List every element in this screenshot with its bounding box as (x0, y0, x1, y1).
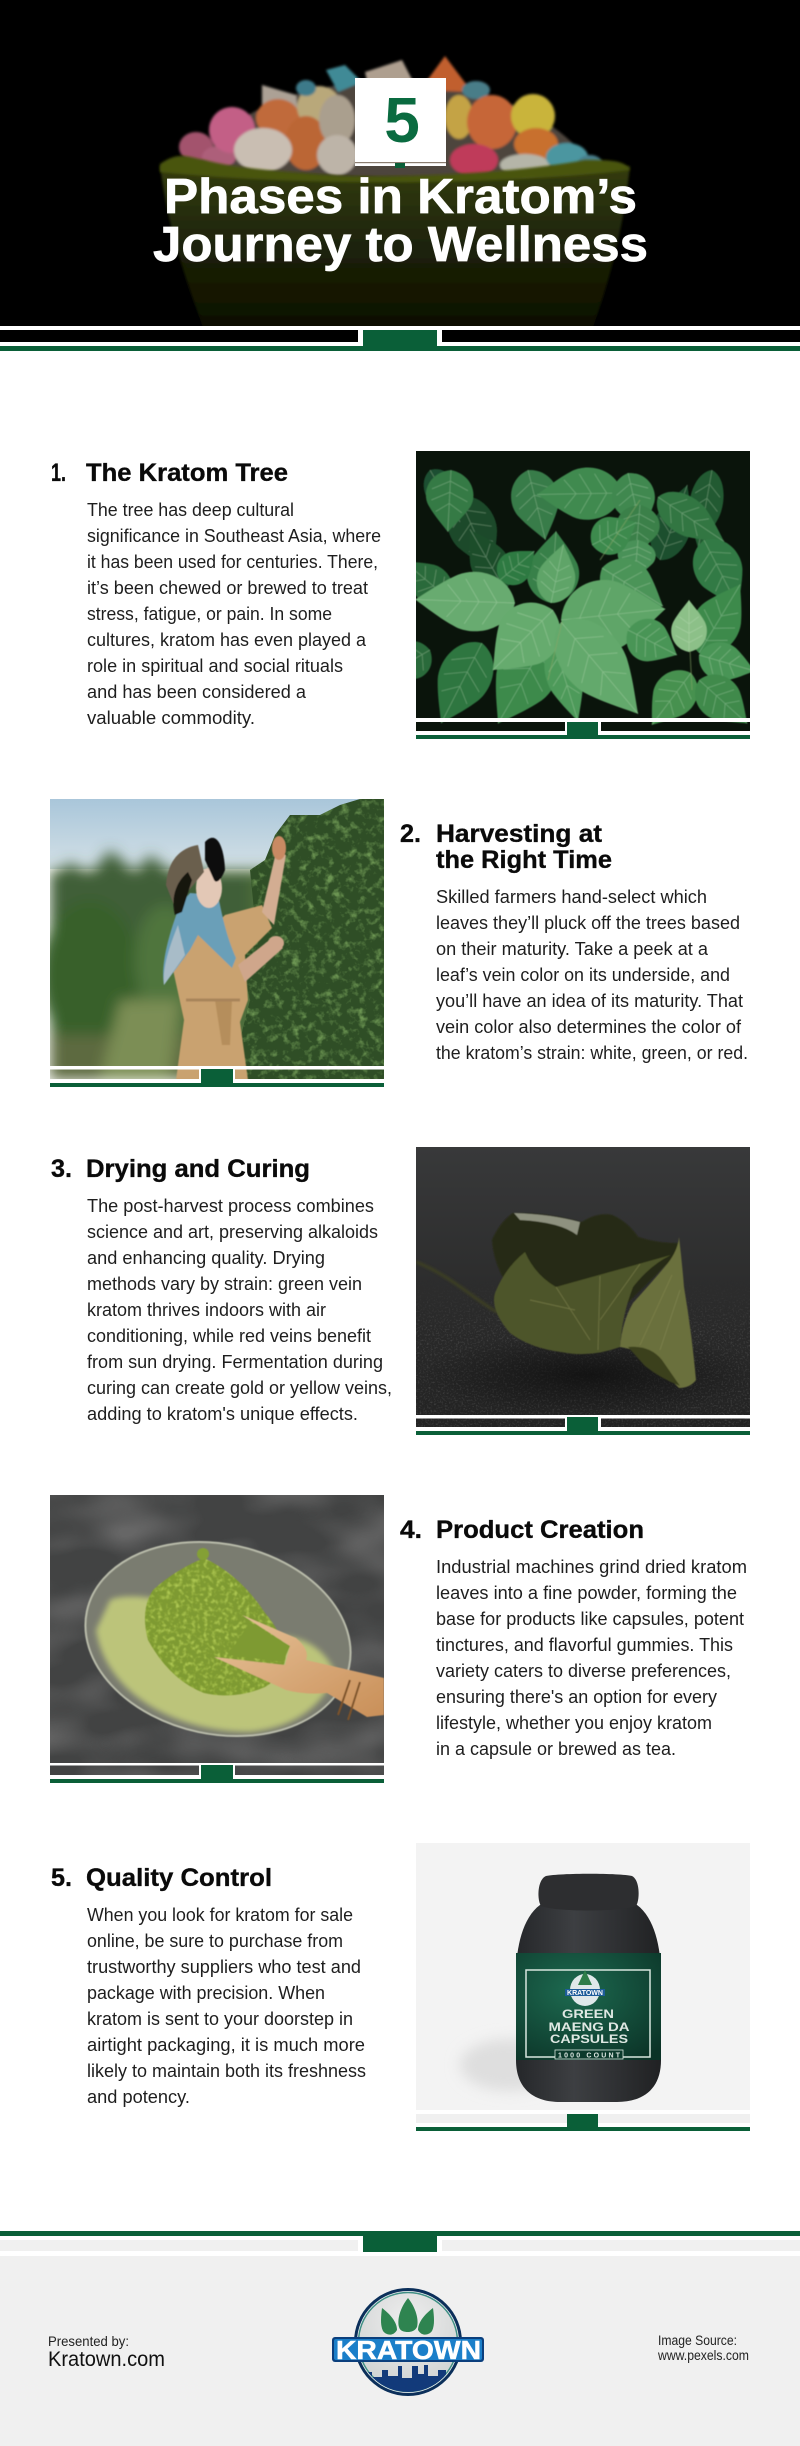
stripe bar 5 (416, 2114, 750, 2131)
image source: Image Source: (658, 2333, 737, 2348)
heading 4: 4. (400, 1516, 422, 1544)
text block 3: conditioning, while red veins benefit (87, 1326, 371, 1346)
text block 3: from sun drying. Fermentation during (87, 1352, 383, 1372)
text block 5: When you look for kratom for sale (87, 1905, 353, 1925)
bottom stripe bar (0, 326, 800, 351)
label text (548, 2009, 630, 2060)
heading 2: Harvesting at (436, 820, 603, 848)
jar cap (538, 1874, 639, 1910)
heading 1: The Kratom Tree (86, 459, 288, 487)
image source (657, 2333, 749, 2363)
section 1: The Kratom Tree (51, 451, 762, 739)
label logo: KRATOWN (567, 1990, 603, 1997)
title: Journey to Wellness (153, 218, 648, 272)
label text: MAENG DA (548, 2022, 630, 2034)
text block 5: kratom is sent to your doorstep in (87, 2009, 353, 2029)
heading 2 (400, 820, 612, 874)
heading 3: 3. (51, 1155, 72, 1183)
label text: GREEN (562, 2009, 614, 2021)
text block 4: ensuring there's an option for every (436, 1687, 717, 1707)
text block 1: significance in Southeast Asia, where (87, 526, 381, 546)
photo: green leaves (416, 451, 750, 731)
skyline (368, 2365, 446, 2392)
label text: 1000 COUNT (558, 2052, 621, 2060)
presented by: Presented by: (48, 2333, 129, 2349)
text block 2: you’ll have an idea of its maturity. That (436, 991, 743, 1011)
text block 4: Industrial machines grind dried kratom (436, 1557, 747, 1577)
hat (166, 844, 204, 904)
text block 4: variety caters to diverse preferences, (436, 1661, 731, 1681)
wordmark: KRATOWN (336, 2337, 481, 2365)
text block 1: role in spiritual and social rituals (87, 656, 343, 676)
text block 2: leaf’s vein color on its underside, and (436, 965, 730, 985)
text block 4: leaves into a fine powder, forming the (436, 1583, 737, 1603)
text block 1: it has been used for centuries. There, (87, 552, 378, 572)
text block 3: adding to kratom's unique effects. (87, 1404, 358, 1424)
text block 2: Skilled farmers hand-select which (436, 887, 707, 907)
text block 4: tinctures, and flavorful gummies. This (436, 1635, 733, 1655)
text block 2: on their maturity. Take a peek at a (436, 939, 709, 959)
text block 3: and enhancing quality. Drying (87, 1248, 325, 1268)
text block 5: package with precision. When (87, 1983, 325, 2003)
text block 1: valuable commodity. (87, 708, 255, 728)
label logo (565, 1970, 605, 2006)
section 3: Drying and Curing (51, 1147, 760, 1435)
text block 5 (87, 1905, 366, 2107)
text block 3 (87, 1196, 392, 1424)
text block 2: vein color also determines the color of (436, 1017, 742, 1037)
text block 4: in a capsule or brewed as tea. (436, 1739, 676, 1759)
footer (0, 2231, 800, 2446)
text block 2: the kratom’s strain: white, green, or red. (436, 1043, 748, 1063)
stripe bar 4 (50, 1763, 384, 1783)
text block 3: curing can create gold or yellow veins, (87, 1378, 392, 1398)
presented by (48, 2333, 165, 2371)
text block 1: it’s been chewed or brewed to treat (87, 578, 368, 598)
heading 2: the Right Time (436, 846, 612, 874)
header banner (0, 0, 800, 351)
photo: capsule jar (416, 1843, 750, 2110)
heading 2: 2. (400, 820, 421, 848)
footer stripe bar (0, 2231, 800, 2252)
text block 5: airtight packaging, it is much more (87, 2035, 365, 2055)
hair (163, 893, 236, 985)
stripe bar 3 (416, 1415, 750, 1435)
text block 1: and has been considered a (87, 682, 307, 702)
text block 5: and potency. (87, 2087, 190, 2107)
text block 5: likely to maintain both its freshness (87, 2061, 366, 2081)
text block 2 (436, 887, 748, 1063)
dress (172, 905, 272, 1080)
text block 1: cultures, kratom has even played a (87, 630, 367, 650)
heading 3: Drying and Curing (86, 1155, 310, 1183)
number badge: 5 (384, 84, 420, 156)
heading 1: 1. (51, 459, 66, 487)
logo (332, 2288, 484, 2396)
heading 5: Quality Control (86, 1864, 272, 1892)
text block 5: online, be sure to purchase from (87, 1931, 343, 1951)
text block 2: leaves they’ll pluck off the trees based (436, 913, 740, 933)
section 4: Product Creation (50, 1495, 747, 1783)
text block 5: trustworthy suppliers who test and (87, 1957, 361, 1977)
stripe bar 2 (50, 1066, 384, 1087)
text block 1 (87, 500, 381, 728)
text block 3: The post-harvest process combines (87, 1196, 374, 1216)
text block 3: methods vary by strain: green vein (87, 1274, 362, 1294)
text block 1: stress, fatigue, or pain. In some (87, 604, 332, 624)
section 5: Quality Control (51, 1843, 750, 2131)
number badge (355, 78, 446, 168)
heading 4: Product Creation (436, 1516, 644, 1544)
face (196, 868, 222, 908)
stripe bar 1 (416, 718, 750, 739)
photo: bowl of gummies (160, 56, 630, 330)
photo: dried leaf (416, 1147, 760, 1427)
text block 3: kratom thrives indoors with air (87, 1300, 326, 1320)
text block 4: lifestyle, whether you enjoy kratom (436, 1713, 712, 1733)
presented by: Kratown.com (48, 2348, 165, 2371)
photo: woman harvesting (40, 799, 384, 1080)
jar body (516, 1902, 661, 2102)
section 2: Harvesting (40, 799, 748, 1087)
title (153, 170, 648, 272)
text block 4 (436, 1557, 747, 1759)
text block 4: base for products like capsules, potent (436, 1609, 744, 1629)
title: Phases in Kratom’s (164, 170, 637, 224)
label text: CAPSULES (550, 2034, 628, 2046)
image source: www.pexels.com (657, 2348, 749, 2363)
text block 1: The tree has deep cultural (87, 500, 294, 520)
photo: green powder on plate (50, 1495, 384, 1775)
leaves (381, 2298, 434, 2335)
heading 5: 5. (51, 1864, 72, 1892)
text block 3: science and art, preserving alkaloids (87, 1222, 378, 1242)
arms (262, 852, 286, 925)
